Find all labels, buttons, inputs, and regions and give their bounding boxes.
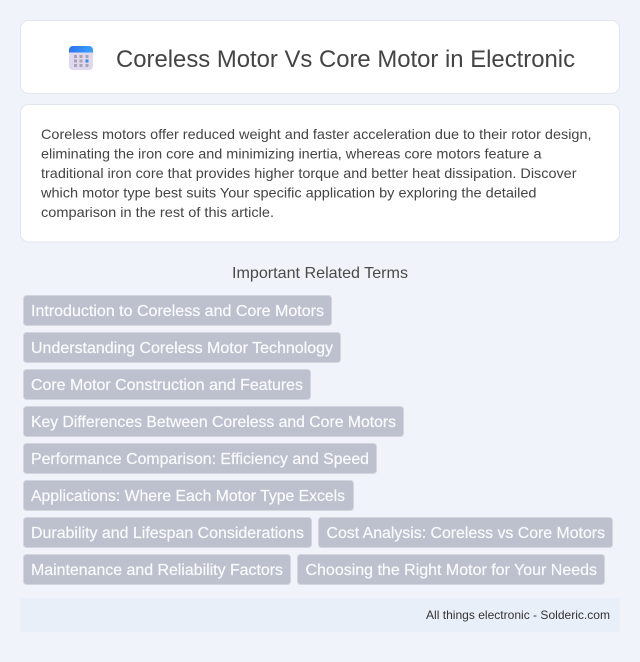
text block: description bbox=[40, 126, 591, 220]
text block: description: comparison in the rest of this article. bbox=[41, 204, 274, 220]
text block: description: eliminating the iron core and minimizing inertia, whereas core motors feature a bbox=[41, 146, 542, 162]
tag: cost analysis: Cost Analysis: Coreless vs Core Motors bbox=[326, 525, 605, 542]
tag: construction: Core Motor Construction and Features bbox=[31, 377, 303, 394]
tag: key differences: Key Differences Between Coreless and Core Motors bbox=[31, 414, 396, 431]
tag: applications bbox=[24, 480, 354, 510]
panel: header bbox=[20, 20, 620, 94]
title: Coreless Motor Vs Core Motor in Electronic bbox=[116, 46, 575, 73]
tag: construction bbox=[24, 370, 310, 400]
footer text: All things electronic - Solderic.com bbox=[426, 608, 610, 622]
panel: intro description bbox=[20, 104, 620, 242]
tag: durability bbox=[24, 518, 312, 548]
tag: choosing: Choosing the Right Motor for Your Needs bbox=[306, 562, 597, 579]
tag: performance bbox=[24, 444, 376, 474]
tag: maintenance: Maintenance and Reliability Factors bbox=[31, 562, 283, 579]
tag: cost analysis bbox=[318, 518, 612, 548]
text block: description: Coreless motors offer reduced weight and faster acceleration due to their rotor design, bbox=[41, 126, 592, 142]
tag: introduction bbox=[24, 296, 332, 326]
tag: applications: Applications: Where Each Motor Type Excels bbox=[31, 488, 345, 505]
tag: introduction: Introduction to Coreless and Core Motors bbox=[31, 303, 324, 320]
tag: performance: Performance Comparison: Efficiency and Speed bbox=[31, 451, 369, 468]
text block: description: which motor type best suits Your specific application by exploring the detailed bbox=[40, 184, 537, 200]
panel: related terms tags bbox=[24, 296, 612, 584]
tag: understanding bbox=[24, 332, 340, 362]
tag: maintenance bbox=[24, 554, 290, 584]
heading: important related terms: Important Related Terms bbox=[232, 265, 408, 282]
text block: description: traditional iron core that provides higher torque and better heat dissipation. Discover bbox=[41, 165, 577, 181]
tag: choosing bbox=[298, 554, 604, 584]
tag: key differences bbox=[24, 406, 404, 436]
icon: calendar bbox=[69, 46, 93, 70]
tag: durability: Durability and Lifespan Considerations bbox=[31, 525, 304, 542]
footer bbox=[20, 598, 620, 632]
tag: understanding: Understanding Coreless Motor Technology bbox=[31, 340, 333, 357]
